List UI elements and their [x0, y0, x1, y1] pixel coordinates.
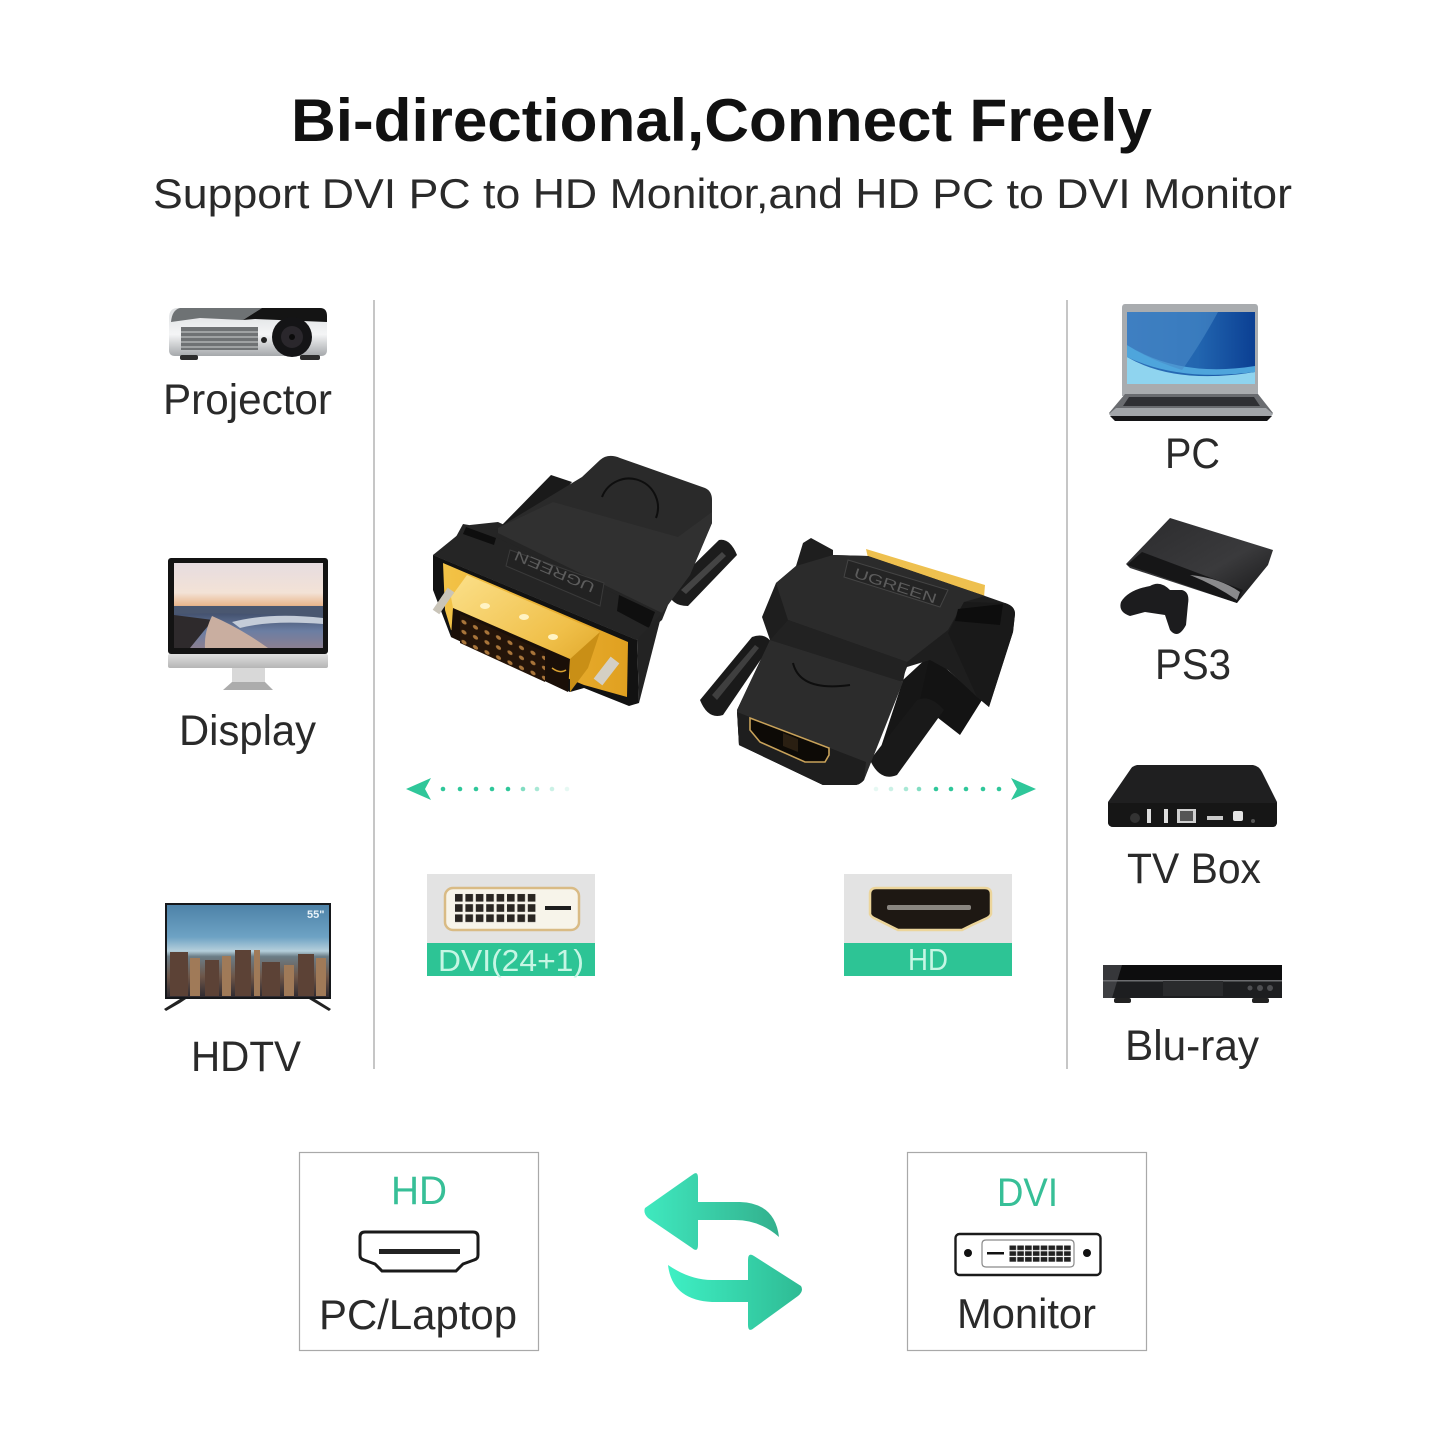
icon: PS3 console [1120, 518, 1273, 634]
label: PC: PC [1165, 430, 1220, 478]
label: HDTV: HDTV [191, 1033, 301, 1081]
label: PS3: PS3 [1155, 641, 1231, 689]
icon: HDMI port [360, 1232, 478, 1271]
icon: swap arrows [644, 1173, 802, 1330]
icon: display [168, 558, 328, 690]
panel: HD PC/Laptop [300, 1152, 538, 1350]
icon: HDTV: 55" [307, 909, 324, 921]
label: PC/Laptop: PC/Laptop [319, 1291, 517, 1338]
icon: laptop [1109, 304, 1273, 421]
arrow: right dotted [874, 778, 1036, 800]
label: Blu-ray: Blu-ray [1125, 1022, 1259, 1070]
adapter: HDMI side view [700, 538, 1015, 785]
label: HD: HD [391, 1169, 447, 1213]
label: Projector: Projector [163, 376, 332, 424]
subtitle: Support DVI PC to HD Monitor,and HD PC to DVI Monitor [153, 170, 1292, 217]
label: DVI: DVI [997, 1171, 1058, 1215]
icon: TV box [1108, 765, 1277, 827]
adapter: DVI side view [433, 456, 737, 706]
adapter: HDMI side view: UGREEN [852, 565, 939, 606]
adapter: DVI side view: UGREEN [512, 548, 597, 596]
icon: Blu-ray player [1103, 965, 1282, 1003]
label: Display: Display [179, 707, 316, 755]
title: Bi-directional,Connect Freely [291, 87, 1153, 154]
panel: DVI Monitor [908, 1152, 1146, 1350]
tag: DVI(24+1): DVI(24+1) [438, 943, 584, 978]
tag: HD: HD [908, 942, 948, 977]
arrow: left dotted [406, 778, 569, 800]
icon: HDTV [164, 903, 331, 1011]
icon: DVI port [956, 1234, 1100, 1275]
tag: DVI(24+1) [427, 874, 595, 978]
label: TV Box: TV Box [1127, 845, 1261, 893]
label: Monitor: Monitor [957, 1290, 1096, 1337]
icon: projector [169, 308, 327, 360]
tag: HD [844, 874, 1012, 977]
